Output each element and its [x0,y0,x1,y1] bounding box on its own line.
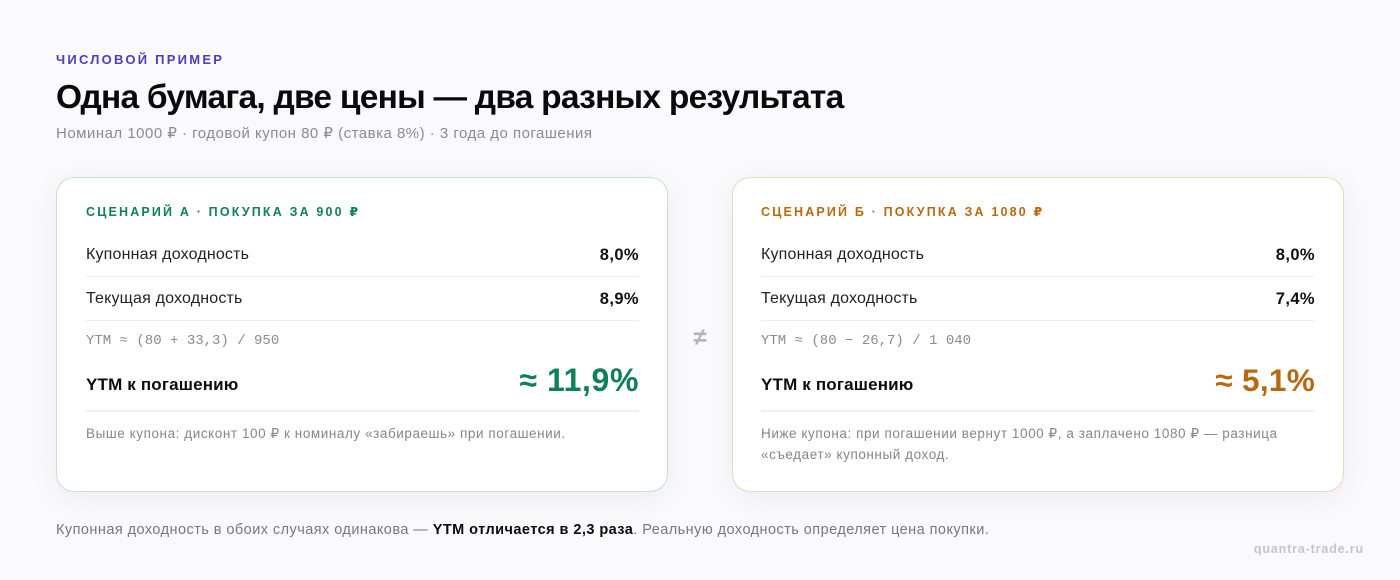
footer summary: Купонная доходность в обоих случаях одинакова — YTM отличается в 2,3 раза. Реальную доходность определяет цена покупки. [56,522,989,538]
scenario B note [761,426,1278,462]
scenario B note: Ниже купона: при погашении вернут 1000 ₽, а заплачено 1080 ₽ — разница [761,426,1278,440]
coupon yield row: Купонная доходность [761,246,924,263]
current yield row: Текущая доходность [761,290,918,307]
current yield row: Текущая доходность [86,290,243,307]
coupon yield value: 8,0% [600,246,639,264]
watermark: quantra-trade.ru [1254,542,1364,556]
YTM label: YTM к погашению [761,375,913,394]
coupon yield row: Купонная доходность [86,246,249,263]
YTM formula: YTM ≈ (80 + 33,3) / 950 [86,333,279,349]
current yield value: 8,9% [600,290,639,308]
YTM value: ≈ 5,1% [1215,362,1315,398]
scenario A heading: СЦЕНАРИЙ А · ПОКУПКА ЗА 900 ₽ [86,205,360,219]
scenario A note: Выше купона: дисконт 100 ₽ к номиналу «забираешь» при погашении. [86,426,566,440]
panel: scenario A [56,177,668,492]
coupon yield value: 8,0% [1276,246,1315,264]
panel: scenario B [732,177,1344,492]
subtitle: Номинал 1000 ₽ · годовой купон 80 ₽ (ставка 8%) · 3 года до погашения [56,125,592,142]
YTM label: YTM к погашению [86,375,238,394]
current yield value: 7,4% [1276,290,1315,308]
YTM formula: YTM ≈ (80 − 26,7) / 1 040 [761,333,971,349]
not equal sign: ≠ [693,324,707,351]
YTM value: ≈ 11,9% [519,362,639,398]
title: Одна бумага, две цены — два разных результата [56,79,843,116]
eyebrow: ЧИСЛОВОЙ ПРИМЕР [56,52,224,67]
scenario B heading: СЦЕНАРИЙ Б · ПОКУПКА ЗА 1080 ₽ [761,205,1044,219]
scenario B note: «съедает» купонный доход. [761,446,949,462]
